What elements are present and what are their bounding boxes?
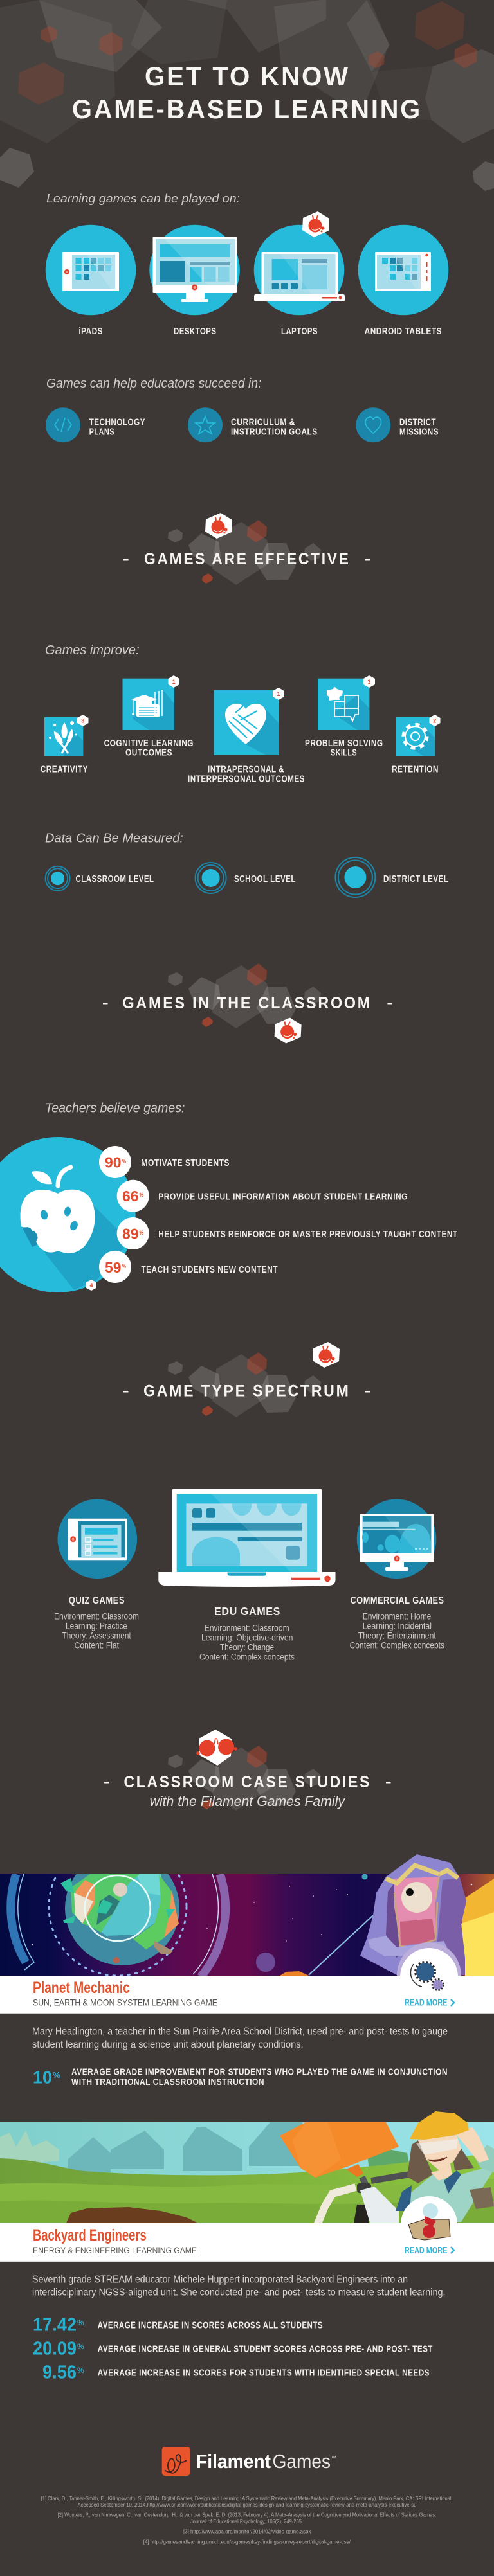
level: district	[335, 857, 448, 897]
icon: apple on circle	[0, 1137, 136, 1292]
text block: edu games: EDU GAMES	[214, 1605, 280, 1618]
stat: 9.56 percent	[42, 2363, 430, 2383]
icon: hexagon badge on laptop	[302, 211, 329, 237]
tile: problem solving skills	[318, 675, 375, 730]
stat: 59 percent: TEACH STUDENTS NEW CONTENT	[141, 1265, 278, 1275]
references: Journal of Educational Psychology, 105(2), 249-265.	[190, 2518, 303, 2525]
stat: 66 percent	[117, 1180, 408, 1212]
stat: 59 percent: %	[122, 1263, 126, 1269]
stat: 9.56 percent: 9.56	[42, 2363, 77, 2383]
logo: Filament Games: Filament	[196, 2450, 271, 2473]
section heading: games are effective	[124, 513, 370, 585]
case study paragraph: Backyard Engineers: Seventh grade STREAM educator Michele Huppert incorporated Backyard Engineers into an	[32, 2275, 408, 2285]
section heading: game type spectrum	[124, 1342, 370, 1417]
item: district missions	[356, 407, 439, 442]
icon: edu games laptop	[158, 1489, 336, 1587]
title: GET TO KNOW	[145, 61, 350, 91]
stat: 90 percent: MOTIVATE STUDENTS	[141, 1158, 230, 1168]
stat: 59 percent	[99, 1251, 278, 1283]
tile: intrapersonal and interpersonal outcomes	[214, 688, 284, 755]
text block: commercial games: Environment: Home	[363, 1611, 432, 1621]
header background hexagons	[0, 0, 494, 191]
stat: 17.42 percent: AVERAGE INCREASE IN SCORES ACROSS ALL STUDENTS	[98, 2321, 323, 2331]
references: [2] Wouters, P., van Nimwegen, C., van Oostendorp, H., & van der Spek, E. D. (2013, February 4). A Meta-Analysis of the Cognitive and Motivational Effects of Serious Games.	[58, 2512, 436, 2518]
tile: creativity	[44, 715, 89, 756]
text block: edu games: Environment: Classroom	[205, 1623, 289, 1633]
item: technology plans: TECHNOLOGY	[89, 418, 145, 428]
logo: Filament Games: Games	[273, 2450, 331, 2473]
case study title bar: Backyard Engineers	[0, 2196, 494, 2262]
icon: quiz games tablet	[58, 1499, 137, 1579]
references: Accessed September 10, 2014.http://www.sri.com/work/publications/digital-games-design-and-learning-systematic-review-and-meta-analysis-executive-su	[77, 2501, 417, 2508]
level: school: SCHOOL LEVEL	[234, 874, 296, 884]
stat: 90 percent: 90	[105, 1154, 121, 1171]
tile label: cognitive learning outcomes	[104, 738, 194, 758]
device labels: LAPTOPS	[281, 326, 318, 337]
case study paragraph: Planet Mechanic: Mary Headington, a teacher in the Sun Prairie Area School District, used pre- and post- tests to gauge	[32, 2026, 448, 2037]
text block: quiz games: Theory: Assessment	[62, 1630, 131, 1640]
text block: commercial games: Learning: Incidental	[363, 1620, 432, 1631]
case study banner: Backyard Engineers	[0, 2111, 494, 2225]
icon: android tablet	[358, 225, 448, 315]
device labels: DESKTOPS	[174, 326, 216, 337]
item: curriculum and instruction goals: CURRICULUM &	[231, 418, 295, 428]
tile: intrapersonal and interpersonal outcomes: 1	[277, 691, 280, 697]
section heading: games are effective: GAMES ARE EFFECTIVE	[144, 550, 351, 568]
section heading: games in the classroom: GAMES IN THE CLASSROOM	[122, 994, 372, 1012]
section heading: game type spectrum: GAME TYPE SPECTRUM	[143, 1382, 351, 1400]
tile label: cognitive learning outcomes: OUTCOMES	[125, 748, 172, 758]
section heading: games in the classroom	[103, 963, 392, 1044]
tile label: intrapersonal and interpersonal outcomes: INTRAPERSONAL &	[208, 765, 284, 775]
level: district: DISTRICT LEVEL	[383, 874, 448, 884]
subheading: data measured: Data Can Be Measured:	[45, 832, 183, 846]
icon: apple on circle: 4	[89, 1282, 93, 1289]
device labels: iPADS	[78, 326, 103, 337]
text block: edu games: Content: Complex concepts	[199, 1652, 295, 1662]
section heading: classroom case studies	[104, 1730, 391, 1811]
stat: 20.09 percent: %	[77, 2342, 84, 2351]
tile label: intrapersonal and interpersonal outcomes	[188, 765, 305, 785]
stat: 20.09 percent: 20.09	[33, 2338, 77, 2359]
tile: creativity: 3	[81, 717, 84, 724]
stat: 10 percent grade improvement: %	[53, 2070, 60, 2080]
icon: commercial games desktop	[357, 1499, 436, 1579]
text block: quiz games: Environment: Classroom	[54, 1611, 139, 1621]
subheading: devices: Learning games can be played on:	[46, 192, 240, 205]
level: school	[196, 863, 296, 893]
case study title bar: Planet Mechanic: READ MORE	[405, 1998, 448, 2008]
text block: quiz games: Learning: Practice	[66, 1620, 127, 1631]
references: [4] http://gamesandlearning.umich.edu/a-games/key-findings/survey-report/digital-game-use/	[143, 2539, 351, 2545]
section heading: classroom case studies: with the Filament Games Family	[150, 1793, 346, 1809]
device labels: ANDROID TABLETS	[365, 326, 442, 337]
tile: cognitive learning outcomes	[122, 675, 179, 730]
case study title bar: Planet Mechanic: Planet Mechanic	[33, 1979, 130, 1997]
tile: problem solving skills: 3	[367, 679, 371, 685]
case study paragraph: Backyard Engineers	[32, 2275, 445, 2298]
tile label: retention: RETENTION	[392, 765, 439, 775]
text block: edu games	[199, 1605, 295, 1662]
tile: cognitive learning outcomes: 1	[172, 679, 176, 685]
tile label: problem solving skills: SKILLS	[331, 748, 357, 758]
stat: 90 percent	[99, 1146, 230, 1178]
stat: 90 percent: %	[122, 1158, 126, 1165]
text block: quiz games: Content: Flat	[75, 1640, 119, 1650]
stat: 17.42 percent: %	[77, 2318, 84, 2327]
title	[72, 61, 422, 124]
case study title bar: Planet Mechanic: SUN, EARTH & MOON SYSTEM LEARNING GAME	[33, 1998, 217, 2008]
stat: 66 percent: PROVIDE USEFUL INFORMATION ABOUT STUDENT LEARNING	[158, 1192, 408, 1203]
tile label: problem solving skills	[305, 738, 383, 758]
case study paragraph: Backyard Engineers: interdisciplinary NGSS-aligned unit. She conducted pre- and post- tests to measure student learning.	[32, 2287, 445, 2298]
case study title bar: Backyard Engineers: ENERGY & ENGINEERING LEARNING GAME	[33, 2245, 197, 2255]
item: curriculum and instruction goals: INSTRUCTION GOALS	[231, 427, 318, 438]
logo: Filament Games: TM	[331, 2456, 336, 2460]
stat: 10 percent grade improvement: 10	[33, 2068, 52, 2088]
item: technology plans: PLANS	[89, 427, 114, 438]
device labels	[78, 326, 442, 337]
case study title bar: Planet Mechanic	[0, 1942, 494, 2014]
stat: 89 percent: %	[139, 1230, 143, 1236]
level: classroom: CLASSROOM LEVEL	[76, 874, 154, 884]
title: GAME-BASED LEARNING	[72, 94, 422, 124]
icon: laptop	[254, 225, 345, 315]
references	[41, 2495, 453, 2545]
subheading: games improve: Games improve:	[45, 643, 139, 657]
section heading: classroom case studies: CLASSROOM CASE STUDIES	[124, 1773, 371, 1791]
text block: edu games: Learning: Objective-driven	[201, 1632, 293, 1643]
stat: 10 percent grade improvement	[33, 2067, 448, 2088]
tile label: cognitive learning outcomes: COGNITIVE LEARNING	[104, 738, 194, 749]
logo: Filament Games	[162, 2447, 336, 2476]
text block: quiz games: QUIZ GAMES	[69, 1595, 125, 1606]
stat: 89 percent	[117, 1217, 458, 1249]
stat: 17.42 percent: 17.42	[33, 2315, 77, 2336]
case study title bar: Backyard Engineers: READ MORE	[405, 2246, 448, 2256]
case study banner: Planet Mechanic	[0, 1854, 494, 1976]
icon: iPad	[46, 225, 136, 315]
item: curriculum and instruction goals	[188, 407, 318, 442]
tile label: creativity: CREATIVITY	[41, 765, 88, 775]
stat: 10 percent grade improvement: WITH TRADITIONAL CLASSROOM INSTRUCTION	[71, 2077, 264, 2088]
level: classroom	[46, 866, 154, 891]
subheading: educators: Games can help educators succeed in:	[46, 377, 261, 391]
stat: 59 percent: 59	[105, 1259, 121, 1276]
tile: retention	[396, 715, 440, 756]
tile label: problem solving skills: PROBLEM SOLVING	[305, 738, 383, 749]
tile label: intrapersonal and interpersonal outcomes: INTERPERSONAL OUTCOMES	[188, 774, 305, 785]
case study paragraph: Planet Mechanic: student learning during a science unit about planetary conditions.	[32, 2039, 304, 2050]
references: [1] Clark, D., Tanner-Smith, E., Killingsworth, S . (2014). Digital Games, Design and Learning: A Systematic Review and Meta-Analysis (Executive Summary). Menlo Park, CA: SRI International.	[41, 2495, 453, 2501]
stat: 66 percent: %	[139, 1192, 143, 1198]
text block: commercial games: COMMERCIAL GAMES	[351, 1595, 444, 1606]
stat: 20.09 percent	[33, 2338, 433, 2359]
stat: 66 percent: 66	[122, 1188, 139, 1204]
item: district missions: MISSIONS	[399, 427, 439, 438]
text block: commercial games: Theory: Entertainment	[358, 1630, 436, 1640]
item: district missions: DISTRICT	[399, 418, 436, 428]
tile: retention: 2	[433, 717, 436, 724]
stat: 9.56 percent: %	[77, 2366, 84, 2375]
case study title bar: Backyard Engineers: Backyard Engineers	[33, 2226, 147, 2244]
text block: edu games: Theory: Change	[220, 1642, 274, 1652]
stat: 89 percent: 89	[122, 1226, 139, 1242]
stat: 17.42 percent	[33, 2315, 323, 2336]
case study paragraph: Planet Mechanic	[32, 2026, 448, 2050]
references: [3] http://www.apa.org/monitor/2014/02/video-game.aspx	[183, 2528, 311, 2535]
text block: quiz games	[54, 1595, 139, 1650]
item: technology plans	[46, 407, 145, 442]
icon: desktop	[149, 225, 240, 315]
text block: commercial games	[350, 1595, 444, 1650]
subheading: teachers believe: Teachers believe games:	[45, 1102, 185, 1116]
text block: commercial games: Content: Complex concepts	[350, 1640, 444, 1650]
